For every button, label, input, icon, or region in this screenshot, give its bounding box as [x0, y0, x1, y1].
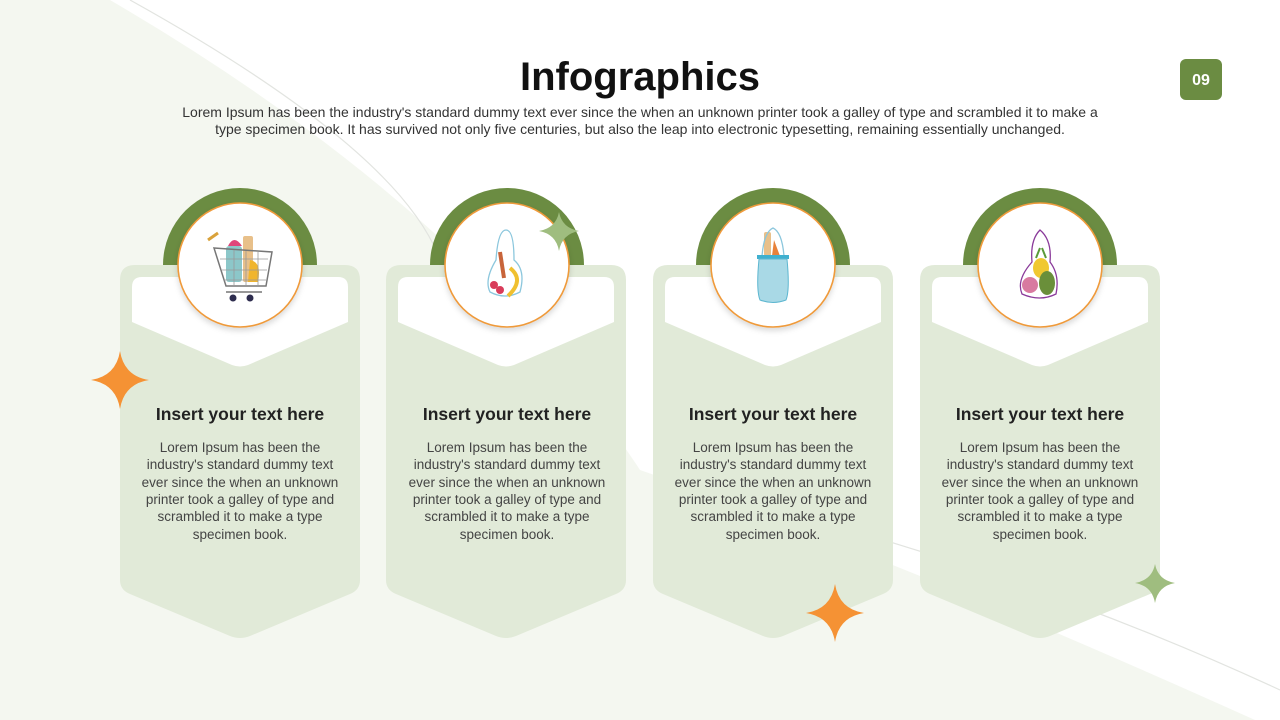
- card 2 body: ever since the when an unknown: [409, 475, 605, 490]
- page number badge: 09: [1192, 72, 1210, 89]
- card 4 body: [942, 440, 1138, 542]
- card 3 body: specimen book.: [726, 527, 820, 542]
- card 3: [653, 188, 893, 638]
- card 4 body: ever since the when an unknown: [942, 475, 1138, 490]
- card 3 heading: Insert your text here: [689, 404, 857, 424]
- page number badge: [1180, 59, 1222, 100]
- sparkle: green bottom right: [1135, 564, 1175, 603]
- card 2 body: industry's standard dummy text: [414, 457, 600, 472]
- icon: shopping cart: [208, 233, 272, 302]
- subtitle text: type specimen book. It has survived not only five centuries, but also the leap into electronic typesetting, remaining essentially unchanged.: [215, 121, 1065, 137]
- card 4 heading: Insert your text here: [956, 404, 1124, 424]
- icon: purple mesh bag with fruit: [1020, 230, 1057, 298]
- card 3 body: printer took a galley of type and: [679, 492, 867, 507]
- card 4 body: specimen book.: [993, 527, 1087, 542]
- card 4 body: industry's standard dummy text: [947, 457, 1133, 472]
- sparkle: orange bottom: [806, 584, 864, 642]
- title: Infographics: [520, 55, 760, 99]
- card 3 body: ever since the when an unknown: [675, 475, 871, 490]
- card 2 body: printer took a galley of type and: [413, 492, 601, 507]
- card 2 body: [409, 440, 605, 542]
- card 1: [120, 188, 360, 638]
- card 2: [386, 188, 626, 638]
- card 2 body: scrambled it to make a type: [424, 509, 590, 524]
- card 1 body: ever since the when an unknown: [142, 475, 338, 490]
- icon: mesh bag with bananas: [488, 230, 522, 296]
- card 4 body: scrambled it to make a type: [957, 509, 1123, 524]
- card 3 body: scrambled it to make a type: [690, 509, 856, 524]
- card 2 body: Lorem Ipsum has been the: [427, 440, 587, 455]
- card 1 body: industry's standard dummy text: [147, 457, 333, 472]
- card 3 body: Lorem Ipsum has been the: [693, 440, 853, 455]
- card 4 body: Lorem Ipsum has been the: [960, 440, 1120, 455]
- subtitle text: Lorem Ipsum has been the industry's standard dummy text ever since the when an unknown printer took a galley of type and scrambled it to make a: [182, 104, 1098, 120]
- sparkle: orange left: [91, 351, 149, 409]
- card 2 heading: Insert your text here: [423, 404, 591, 424]
- card 1 body: scrambled it to make a type: [157, 509, 323, 524]
- sparkle: green near card 2: [539, 212, 579, 251]
- card 3 body: [675, 440, 871, 542]
- subtitle text: [182, 104, 1098, 137]
- card 1 body: specimen book.: [193, 527, 287, 542]
- card 1 body: Lorem Ipsum has been the: [160, 440, 320, 455]
- icon: blue mesh bag: [757, 228, 789, 302]
- card 4 body: printer took a galley of type and: [946, 492, 1134, 507]
- card 1 body: printer took a galley of type and: [146, 492, 334, 507]
- card 2 body: specimen book.: [460, 527, 554, 542]
- card 3 body: industry's standard dummy text: [680, 457, 866, 472]
- card 4: [920, 188, 1160, 638]
- card 1 heading: Insert your text here: [156, 404, 324, 424]
- card 1 body: [142, 440, 338, 542]
